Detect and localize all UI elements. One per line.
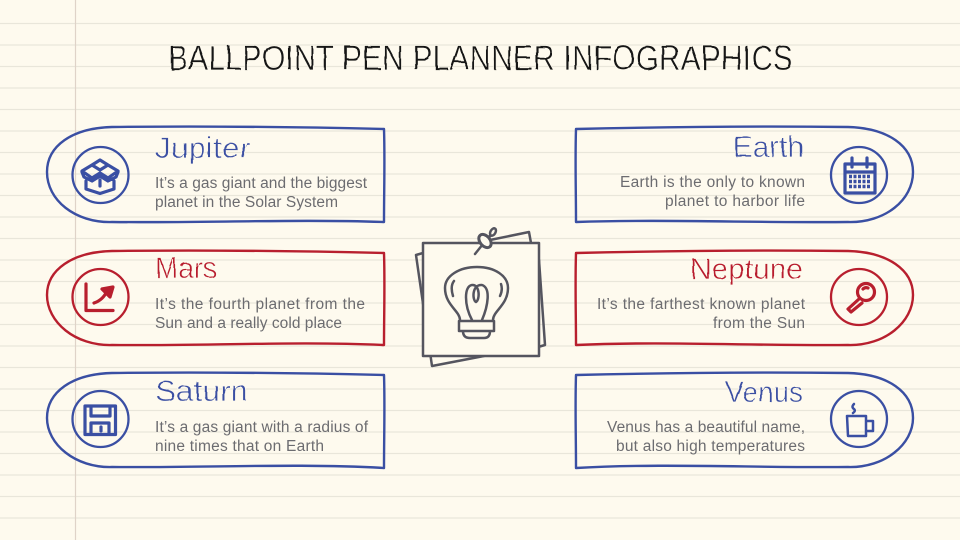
light bulb [445,267,508,338]
heading: Neptune: Neptune [690,253,803,286]
text: Saturn description: nine times that on Earth [155,438,324,455]
panel: Mars [47,251,384,345]
text: Mars description: Sun and a really cold place [155,315,342,332]
panel: Jupiter [47,127,384,222]
text: Venus description: but also high temperatures [616,438,805,455]
panel: Earth [576,127,913,222]
icon: box [72,147,128,203]
text: Jupiter description: planet in the Solar System [155,194,338,211]
heading: Saturn: Saturn [155,375,248,408]
icon: pinned note with light bulb [416,227,545,366]
text: Mars description: It’s the fourth planet from the [155,296,365,313]
icon: floppy disk [72,391,128,447]
text: Saturn description: It’s a gas giant with a radius of [155,419,369,436]
icon: coffee cup [831,391,887,447]
text: Earth description: planet to harbor life [665,193,805,210]
text: Earth description: Earth is the only to known [620,174,805,191]
heading: Jupiter: Jupiter [155,132,250,165]
front note [423,243,539,356]
text: Neptune description: from the Sun [713,315,805,332]
panel: Venus [576,373,913,468]
pin [475,244,483,254]
panel: Saturn [47,373,384,468]
heading: Venus: Venus [725,376,803,409]
heading: Earth: Earth [733,131,804,164]
icon: chart arrow [72,269,128,325]
text: Venus description: Venus has a beautiful name, [607,419,805,436]
text: Neptune description: It’s the farthest known planet [597,296,806,313]
text: Jupiter description: It’s a gas giant and the biggest [155,175,368,192]
title: BALLPOINT PEN PLANNER INFOGRAPHICS [168,39,793,78]
heading: Mars: Mars [155,252,217,285]
panel: Neptune [576,251,913,345]
icon: calendar [831,147,887,203]
back sheets [416,232,545,366]
icon: magnifier [831,269,887,325]
